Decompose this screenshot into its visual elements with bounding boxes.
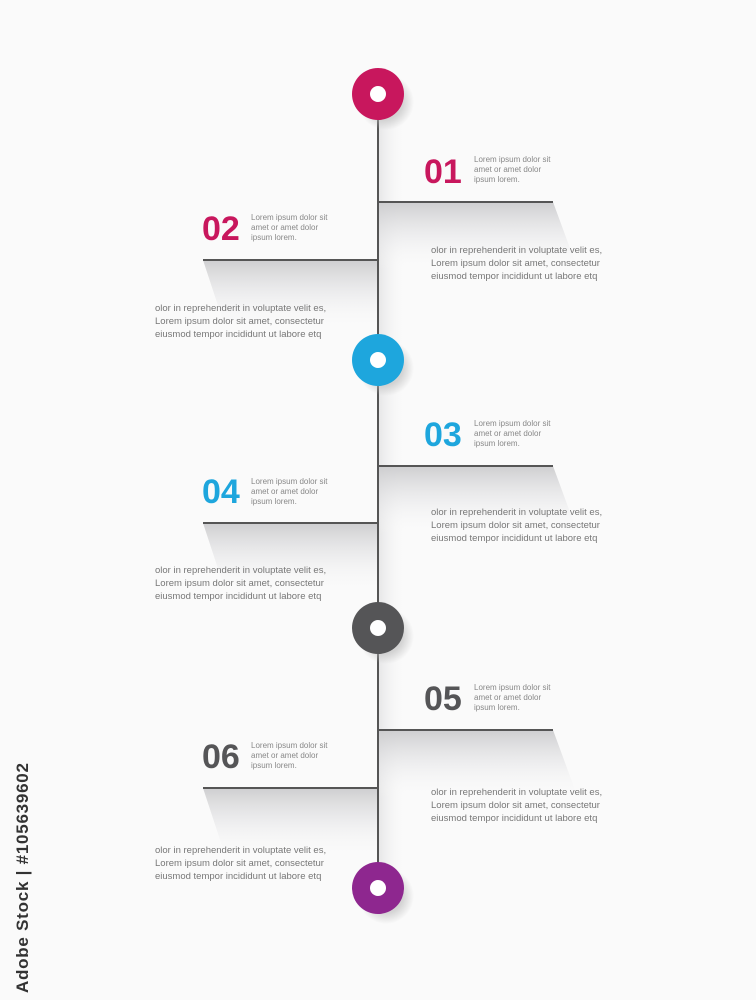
vertical line shadow <box>378 95 406 890</box>
step labels: Lorem ipsum dolor sit <box>474 155 551 164</box>
step labels: Lorem ipsum dolor sit <box>251 477 328 486</box>
step labels: eiusmod tempor incididunt ut labore etq <box>431 271 597 282</box>
step labels: 05 <box>424 680 462 718</box>
step labels: Lorem ipsum dolor sit amet, consectetur <box>155 316 324 327</box>
bars <box>203 202 553 788</box>
step labels: Lorem ipsum dolor sit amet, consectetur <box>431 258 600 269</box>
step labels: Lorem ipsum dolor sit <box>251 741 328 750</box>
step labels: ipsum lorem. <box>251 497 297 506</box>
step labels: 03 <box>424 416 462 454</box>
step labels: 04 <box>202 473 240 511</box>
step labels: olor in reprehenderit in voluptate velit es, <box>155 845 326 856</box>
step labels: amet or amet dolor <box>251 751 318 760</box>
step labels: Lorem ipsum dolor sit <box>474 419 551 428</box>
step labels: eiusmod tempor incididunt ut labore etq <box>431 813 597 824</box>
step labels: Lorem ipsum dolor sit <box>474 683 551 692</box>
step labels: amet or amet dolor <box>251 223 318 232</box>
step labels: 02 <box>202 210 240 248</box>
step labels: ipsum lorem. <box>251 761 297 770</box>
step labels: eiusmod tempor incididunt ut labore etq <box>155 329 321 340</box>
step labels: ipsum lorem. <box>474 439 520 448</box>
step labels: olor in reprehenderit in voluptate velit es, <box>155 303 326 314</box>
step labels: ipsum lorem. <box>474 175 520 184</box>
step labels: amet or amet dolor <box>474 429 541 438</box>
watermark id text: Adobe Stock | #105639602 <box>13 763 32 993</box>
step labels: 01 <box>424 153 462 191</box>
step labels: ipsum lorem. <box>474 703 520 712</box>
step labels: eiusmod tempor incididunt ut labore etq <box>431 533 597 544</box>
step labels <box>155 153 602 882</box>
step labels: eiusmod tempor incididunt ut labore etq <box>155 591 321 602</box>
timeline axis <box>377 94 379 888</box>
step labels: olor in reprehenderit in voluptate velit es, <box>431 787 602 798</box>
step labels: 06 <box>202 738 240 776</box>
step labels: Lorem ipsum dolor sit amet, consectetur <box>431 800 600 811</box>
step labels: olor in reprehenderit in voluptate velit es, <box>431 507 602 518</box>
step labels: amet or amet dolor <box>251 487 318 496</box>
step labels: amet or amet dolor <box>474 693 541 702</box>
step labels: olor in reprehenderit in voluptate velit es, <box>155 565 326 576</box>
step labels: Lorem ipsum dolor sit amet, consectetur <box>431 520 600 531</box>
shadows under bars <box>203 202 578 858</box>
step labels: ipsum lorem. <box>251 233 297 242</box>
step labels: eiusmod tempor incididunt ut labore etq <box>155 871 321 882</box>
step labels: Lorem ipsum dolor sit <box>251 213 328 222</box>
circle markers <box>352 68 414 924</box>
step labels: Lorem ipsum dolor sit amet, consectetur <box>155 858 324 869</box>
step labels: olor in reprehenderit in voluptate velit es, <box>431 245 602 256</box>
step labels: amet or amet dolor <box>474 165 541 174</box>
step labels: Lorem ipsum dolor sit amet, consectetur <box>155 578 324 589</box>
